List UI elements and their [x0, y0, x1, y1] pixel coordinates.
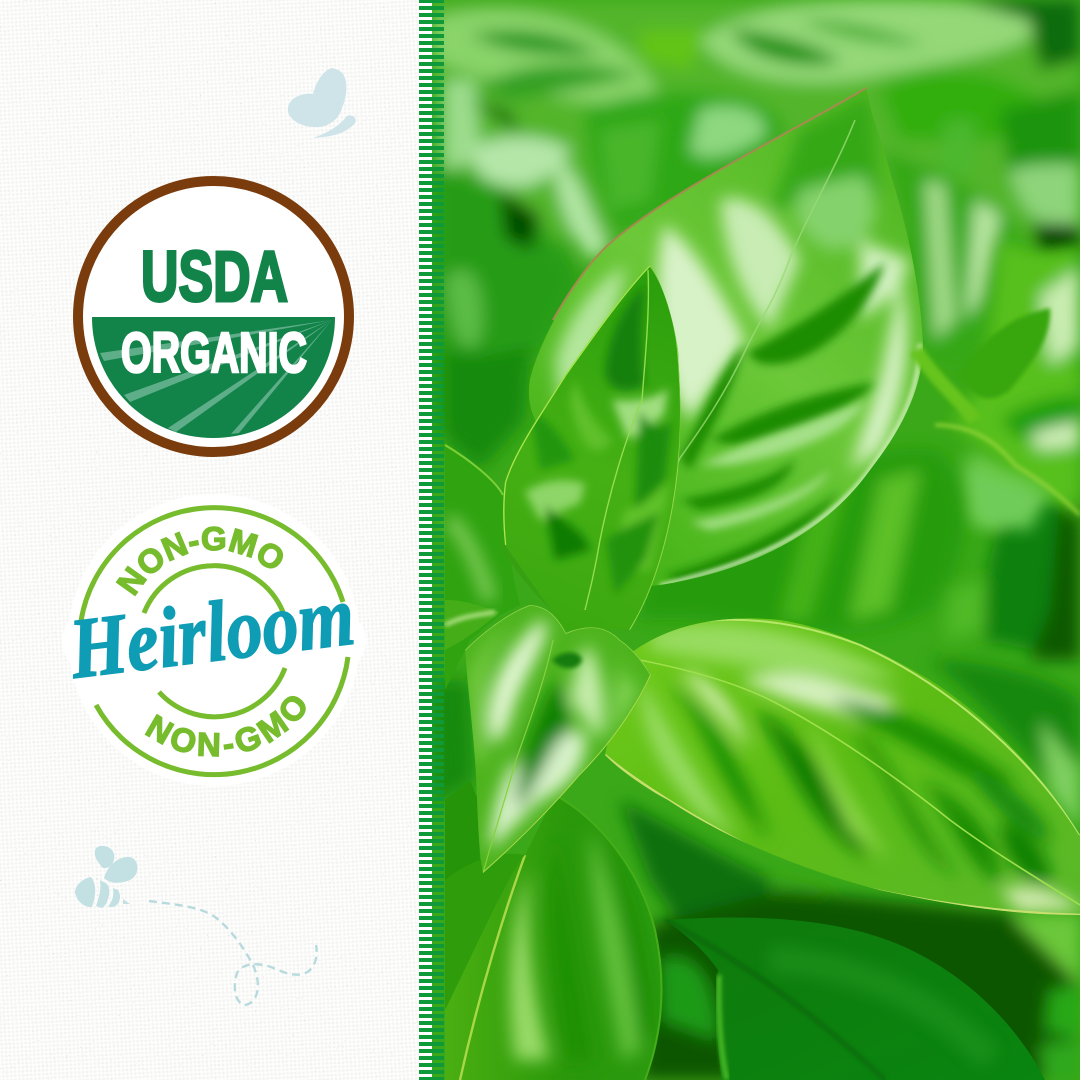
left leaf — [445, 442, 520, 690]
small bud leaves — [510, 552, 548, 607]
icon: butterfly top — [288, 68, 356, 138]
USDA wordmark: USDA — [141, 238, 288, 317]
outer and inner ring arcs — [81, 508, 348, 775]
center cupped leaf — [460, 600, 655, 880]
lower left leaf — [440, 780, 670, 1080]
field furrow rays — [100, 320, 332, 434]
bee dashed flight path — [149, 901, 317, 1005]
right large leaf — [600, 610, 1080, 920]
lower background foliage — [432, 448, 1080, 1080]
large top basil leaf — [520, 80, 930, 600]
blurred background foliage — [432, 0, 1080, 470]
green field half circle — [92, 317, 335, 438]
Heirloom script wordmark: Heirloom — [64, 567, 359, 697]
big leaf reddish edge — [553, 88, 866, 320]
NON-GMO bottom text: NON-GMO — [144, 696, 306, 757]
icon: bee — [75, 846, 138, 908]
photo: fresh basil leaves — [432, 0, 1080, 1080]
right cluster of small leaves — [916, 240, 1080, 530]
bottom dark leaf — [665, 918, 1045, 1080]
ORGANIC wordmark: ORGANIC — [121, 321, 307, 385]
front small leaf — [500, 260, 685, 635]
green striped ribbon — [419, 0, 444, 1080]
NON-GMO top text: NON-GMO — [116, 526, 284, 596]
Heirloom non-GMO badge — [63, 494, 366, 786]
USDA organic seal — [78, 181, 349, 452]
panel: white fabric background — [0, 0, 432, 1080]
